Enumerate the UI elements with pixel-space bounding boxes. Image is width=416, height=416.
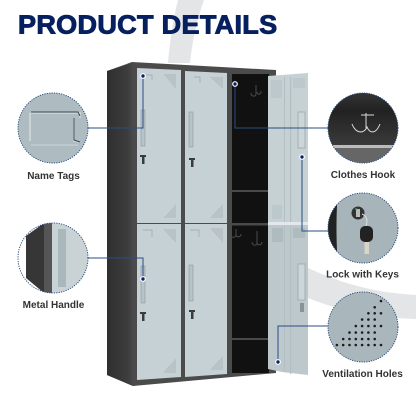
lock detail circle (328, 193, 398, 263)
door name tags (143, 75, 200, 237)
connector: clothes hook (233, 82, 328, 128)
door handles (141, 110, 193, 303)
door vents (163, 74, 223, 373)
compartment shelves (232, 190, 269, 340)
open compartment (232, 74, 269, 373)
connector: metal handle (88, 258, 145, 281)
open door inner panels (268, 77, 308, 374)
callout: metal handle (18, 223, 88, 311)
connector: lock with keys (300, 155, 328, 231)
upper middle door (185, 71, 227, 223)
upper left door (137, 68, 181, 223)
callout: ventilation holes (322, 292, 403, 380)
connector: ventilation holes (276, 326, 328, 364)
callout: lock with keys (326, 193, 399, 280)
locker cabinet (107, 62, 308, 386)
open door (268, 73, 308, 222)
hook detail circle (328, 93, 398, 163)
open door handles (298, 112, 305, 300)
connector: name tags (88, 74, 145, 128)
name tag detail circle (18, 93, 88, 163)
cabinet body (107, 62, 276, 386)
ventilation detail circle (328, 292, 398, 362)
cabinet left side (107, 63, 133, 386)
ventilation ring (328, 292, 398, 362)
metal handle detail circle (26, 223, 88, 293)
lock ring (328, 193, 398, 263)
callout: name tags (18, 93, 88, 182)
hook ring (328, 93, 398, 163)
lower left door (137, 224, 181, 380)
open door lock (300, 303, 304, 312)
ventilation label: Ventilation Holes (322, 369, 403, 380)
lower middle door (185, 224, 227, 377)
callout: clothes hook (328, 93, 398, 181)
title: PRODUCT DETAILS (18, 10, 277, 39)
metal handle label: Metal Handle (23, 300, 85, 311)
name tag ring (18, 93, 88, 163)
metal handle ring (18, 223, 88, 293)
ventilation dots (337, 301, 382, 345)
name tag label: Name Tags (27, 171, 80, 182)
hooks (231, 85, 262, 245)
door locks (140, 155, 195, 321)
lock label: Lock with Keys (326, 270, 399, 280)
background swoosh (168, 0, 416, 319)
hook label: Clothes Hook (331, 170, 396, 181)
